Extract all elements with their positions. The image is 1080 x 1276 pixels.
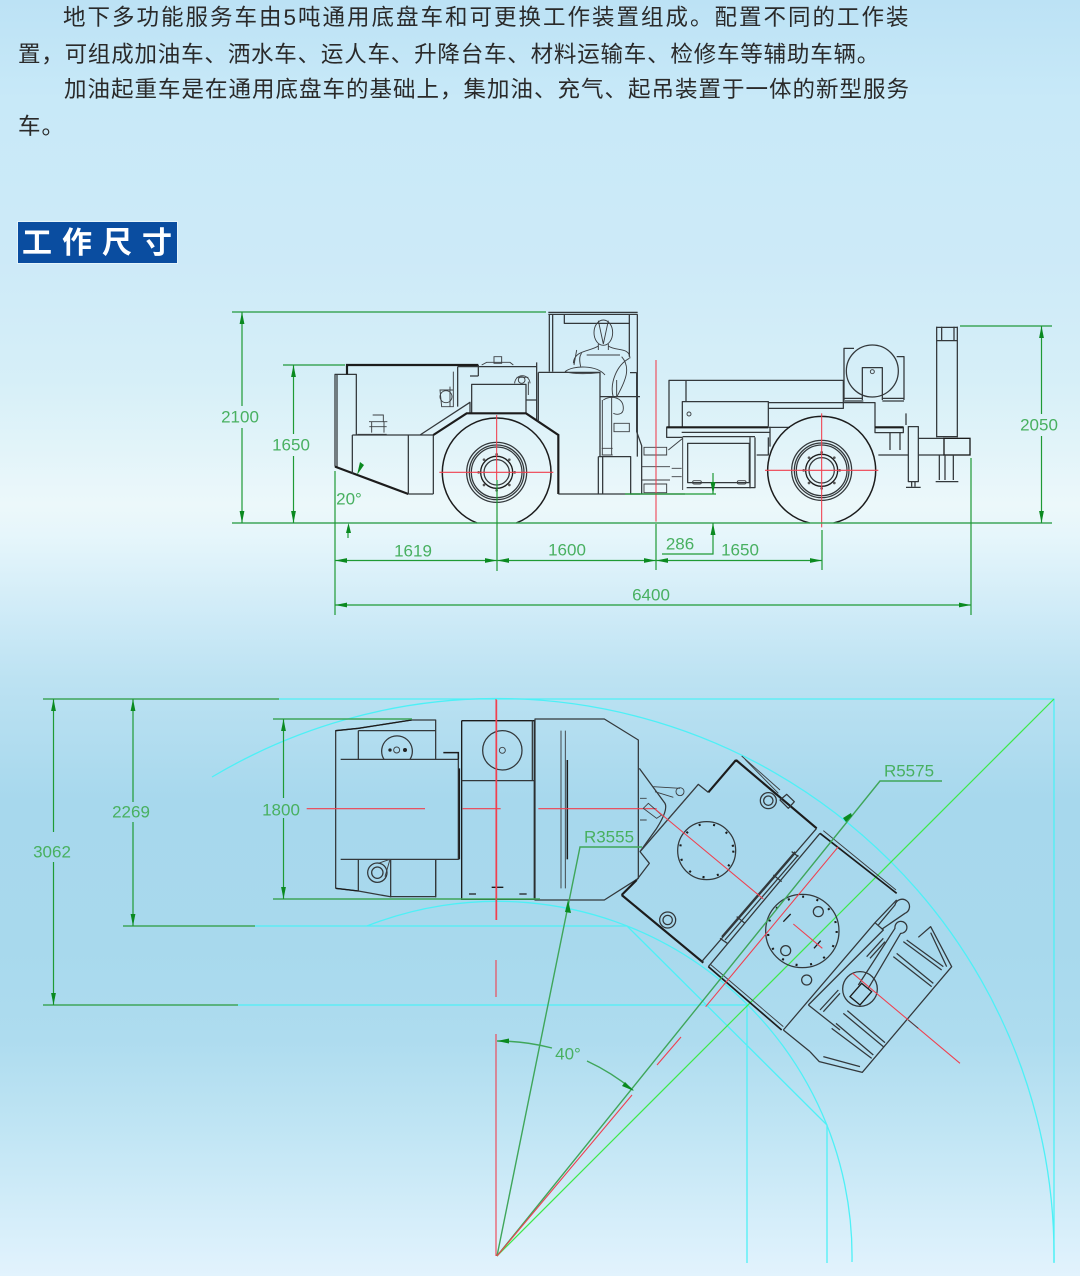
angle 40 degrees xyxy=(496,699,681,1256)
body frame rails xyxy=(667,427,903,488)
articulation joint xyxy=(639,768,666,852)
dimension 2269: 2269 xyxy=(112,802,150,822)
fender xyxy=(433,413,558,494)
callout R5575: R5575 xyxy=(884,762,934,780)
front wheel xyxy=(442,418,551,523)
paragraph 1 line 1: 地下多功能服务车由5吨通用底盘车和可更换工作装置组成。配置不同的工作装 xyxy=(63,5,911,30)
bottom tray xyxy=(391,859,436,897)
boom and turret xyxy=(843,921,907,1006)
angle 20 degrees xyxy=(335,462,364,615)
engine hood and top devices xyxy=(440,357,537,421)
paragraph 2 line 1: 加油起重车是在通用底盘车的基础上，集加油、充气、起吊装置于一体的新型服务 xyxy=(64,77,910,102)
dimension 2050: 2050 xyxy=(1020,416,1058,434)
large hatch xyxy=(678,822,736,880)
rear body outline xyxy=(622,756,817,963)
dimension 1600: 1600 xyxy=(548,540,586,560)
callout R3555: R3555 xyxy=(584,828,634,846)
hatch circle left xyxy=(382,736,412,759)
cab body xyxy=(538,372,640,494)
turning radius construction lines xyxy=(212,699,1054,1263)
dimension 286: 286 xyxy=(666,534,694,554)
wheel centre lines xyxy=(439,415,553,480)
filler cap xyxy=(357,415,387,434)
rear wheel xyxy=(768,416,876,523)
rear frame and jacks xyxy=(878,413,970,487)
heading: 工作尺寸: 工作尺寸 xyxy=(22,227,182,260)
dimension 1650 height: 1650 xyxy=(272,436,310,454)
hinge plates xyxy=(702,828,820,967)
intro text block xyxy=(18,5,911,139)
cab module xyxy=(535,719,638,900)
spare wheel bottom xyxy=(660,912,676,928)
tool box xyxy=(688,443,749,484)
tail end and hook xyxy=(783,899,952,1072)
spare wheel top xyxy=(760,793,794,809)
wheel centre lines xyxy=(656,360,878,527)
cargo hatch xyxy=(766,894,839,985)
dimension 2100: 2100 xyxy=(221,408,259,426)
rear body xyxy=(669,380,875,428)
dimension 1800: 1800 xyxy=(262,800,300,820)
callout R3555 xyxy=(497,828,642,1256)
driver figure xyxy=(565,320,630,455)
side view vehicle: front section xyxy=(335,312,640,523)
top view: front section xyxy=(307,700,666,920)
roll cage xyxy=(548,312,638,457)
articulation hinge xyxy=(630,373,685,494)
side view dimensions xyxy=(221,312,1058,615)
inner arc R3555 xyxy=(367,901,852,1262)
caster wheel xyxy=(368,859,390,882)
body latch xyxy=(687,412,691,416)
dimension 1619: 1619 xyxy=(394,542,432,560)
red centre lines xyxy=(655,809,960,1063)
side view vehicle: rear section xyxy=(630,327,970,527)
dimension 1650 length: 1650 xyxy=(721,540,759,560)
hitch links xyxy=(643,787,684,818)
centre cover xyxy=(341,759,458,859)
trailer cylinders xyxy=(820,938,943,1058)
top view: rotated rear section xyxy=(622,756,960,1072)
dimension 3062: 3062 xyxy=(33,842,71,862)
centre lines xyxy=(307,700,657,920)
bucket and front plate xyxy=(335,365,478,494)
angle 40 degrees: 40° xyxy=(555,1044,581,1064)
outer arc R5575 xyxy=(212,699,1054,1262)
paragraph 2 line 2: 车。 xyxy=(18,114,65,139)
middle module xyxy=(462,721,534,899)
rear mast xyxy=(937,327,957,437)
dimension 6400: 6400 xyxy=(632,586,670,604)
side rails xyxy=(708,831,897,1030)
cable drum xyxy=(844,345,904,401)
dimension 286 xyxy=(625,473,716,554)
top view dimensions xyxy=(33,699,942,1256)
callout R5575 xyxy=(497,762,942,1256)
dimension 6400 xyxy=(335,458,971,615)
rear end body xyxy=(336,720,436,897)
45 degree centre line xyxy=(497,699,1054,1256)
paragraph 1 line 2: 置，可组成加油车、洒水车、运人车、升降台车、材料运输车、检修车等辅助车辆。 xyxy=(18,42,880,67)
angle 20 degrees: 20° xyxy=(336,490,362,508)
pin xyxy=(908,1020,918,1028)
